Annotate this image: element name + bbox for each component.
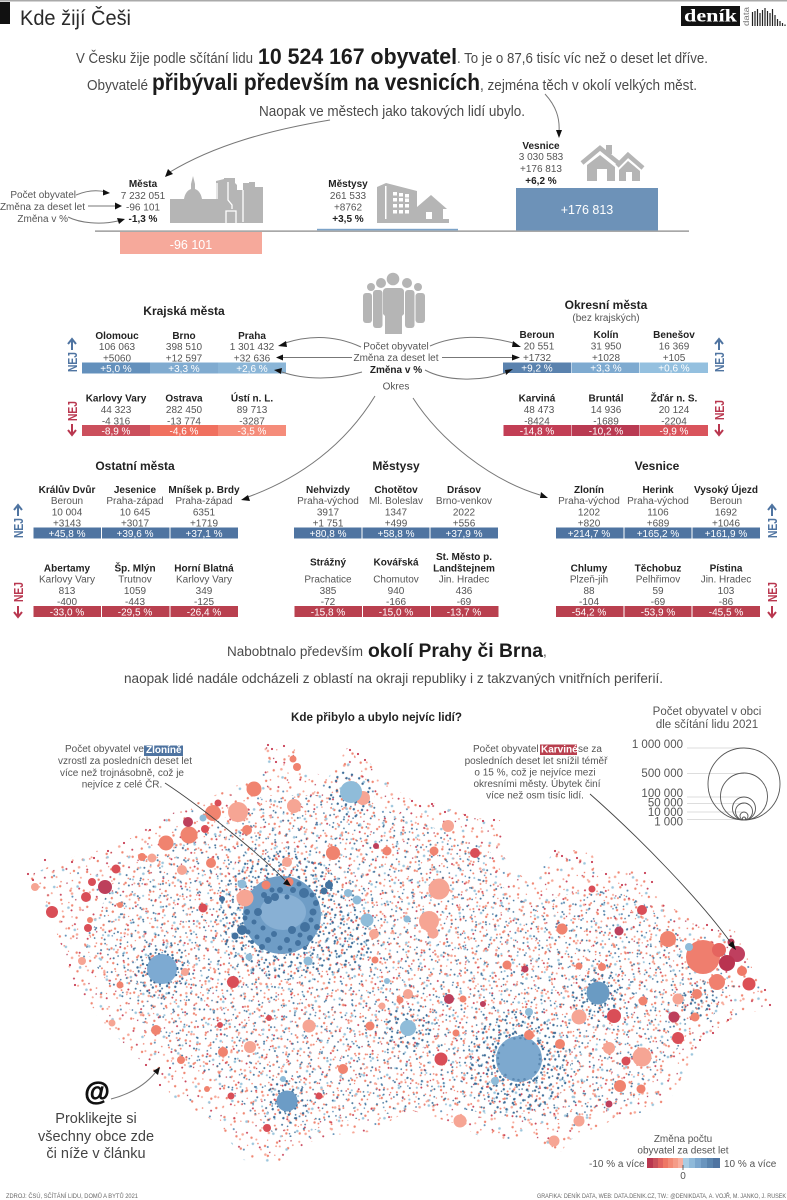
bottom towns: Trutnov — [118, 574, 152, 586]
NEJ down label: NEJ — [11, 582, 26, 602]
top cities: 106 063 — [99, 342, 136, 353]
top villages: 1202 — [578, 508, 601, 518]
bottom cities: Karviná — [519, 394, 556, 404]
top towns: Drásov — [447, 485, 481, 496]
bottom towns: 1059 — [124, 586, 147, 597]
bottom towns: -26,4 % — [187, 608, 221, 618]
click prompt — [38, 1067, 160, 1162]
callout: Karvina: více než osm tisíc lidí. — [486, 790, 584, 802]
bottom villages: -104 — [579, 597, 599, 608]
bottom towns: Prachatice — [304, 574, 352, 586]
heading: Ostatní města — [95, 459, 175, 473]
bottom towns: Abertamy — [44, 564, 90, 574]
settlement type chart — [0, 141, 689, 254]
bottom villages: Jin. Hradec — [701, 574, 751, 586]
top villages: +1046 — [712, 518, 740, 530]
callout: Zlonin: nejvíce z celé ČR. — [82, 778, 162, 790]
labels: mesta: 7 232 051 — [121, 191, 166, 202]
callout: Zlonin: Zloníně — [146, 745, 182, 756]
mid text — [124, 641, 663, 686]
bottom towns: -29,5 % — [118, 608, 152, 618]
labels: vesnice: +6,2 % — [525, 176, 557, 187]
NEJ up label: NEJ — [765, 518, 780, 538]
labels: mestysy — [328, 179, 368, 225]
bottom cities: -8424 — [524, 416, 550, 428]
callout: Zlonin: více než trojnásobně, což je — [60, 768, 184, 779]
bottom cities: 14 936 — [591, 405, 622, 416]
labels: mestysy: 261 533 — [330, 191, 367, 202]
NEJ down label — [712, 400, 727, 435]
bottom villages: -54,2 % — [572, 608, 606, 618]
top cities — [503, 330, 708, 374]
intro text — [76, 44, 708, 120]
bottom towns: Strážný — [310, 558, 346, 568]
bar: mesta — [120, 232, 262, 254]
top cities: 31 950 — [591, 342, 622, 352]
bottom cities: -3287 — [239, 416, 265, 428]
bottom towns: Jin. Hradec — [439, 574, 489, 586]
logo: denik data: data — [742, 6, 751, 26]
bottom villages: Plzeň-jih — [570, 574, 608, 586]
key labels with arrows: Změna v % — [17, 214, 68, 225]
top towns: +45,8 % — [49, 529, 86, 540]
city: Olomouc — [586, 980, 610, 1006]
labels: mesta — [121, 179, 166, 225]
bottom cities: -8,9 % — [102, 426, 131, 438]
bottom cities: Ostrava — [165, 394, 203, 404]
NEJ up label: NEJ — [11, 518, 26, 538]
logo: denik data: deník — [684, 6, 737, 26]
intro text: přibývali především na vesnicích — [152, 69, 480, 95]
bottom towns: -125 — [194, 597, 214, 608]
top villages: Vysoký Újezd — [694, 483, 758, 496]
top towns: +1719 — [190, 518, 218, 530]
bottom towns: -400 — [57, 597, 77, 608]
top towns: Ml. Boleslav — [369, 496, 423, 507]
NEJ up label: NEJ — [65, 352, 80, 372]
top towns: Nehvizdy — [306, 485, 350, 496]
top towns: +37,1 % — [186, 529, 223, 540]
legend: change colour scale: -10 % a více — [589, 1159, 645, 1170]
NEJ down label: NEJ — [765, 582, 780, 602]
heading: Městysy — [372, 459, 420, 473]
arrow: to villages — [545, 94, 562, 138]
mid text: Nabobtnalo především — [227, 644, 363, 659]
legend: change colour scale: obyvatel za deset let — [637, 1146, 729, 1156]
arrow: to villages table — [413, 398, 548, 498]
panel: ostatni mesta — [11, 459, 240, 618]
bottom towns: 813 — [59, 586, 76, 597]
bubble map of Czechia — [0, 730, 787, 1170]
footer: source: ZDROJ: ČSÚ, SČÍTÁNÍ LIDU, DOMŮ A BYTŮ 2021 — [6, 1191, 138, 1200]
top towns: 6351 — [193, 508, 216, 518]
top villages: Praha-východ — [558, 496, 620, 507]
panel: krajska mesta — [65, 304, 286, 438]
top towns: 1347 — [385, 508, 408, 518]
bottom villages: -86 — [719, 597, 734, 608]
top towns — [34, 484, 240, 540]
bar: mestysy — [317, 229, 458, 230]
legend: change colour scale: Změna počtu — [654, 1134, 712, 1145]
bottom villages: -45,5 % — [709, 608, 743, 618]
top villages: Praha-východ — [627, 496, 689, 507]
top cities: +3,3 % — [590, 364, 622, 374]
arrow — [590, 794, 736, 950]
bottom towns: -72 — [321, 597, 336, 608]
top cities: 398 510 — [166, 342, 203, 353]
key labels with arrows: Počet obyvatel — [10, 190, 76, 201]
bottom villages: Pístina — [710, 564, 743, 574]
scattered outer dots — [28, 745, 770, 1085]
intro text: 10 524 167 obyvatel — [258, 44, 457, 69]
icon: people group — [363, 273, 425, 334]
bottom towns: Chomutov — [373, 574, 419, 586]
bottom towns: Šp. Mlýn — [114, 562, 156, 574]
bottom towns: 349 — [196, 586, 213, 597]
top cities — [82, 331, 286, 375]
labels: mestysy: +3,5 % — [332, 214, 364, 225]
intro text: V Česku žije podle sčítání lidu — [76, 50, 253, 67]
key labels center with arrows: Změna v % — [370, 365, 422, 376]
top towns: Králův Dvůr — [39, 484, 95, 496]
top cities: Beroun — [520, 330, 554, 341]
bottom towns: -13,7 % — [447, 608, 481, 618]
bottom towns: -443 — [125, 597, 145, 608]
heading: Krajská města — [143, 304, 225, 318]
top towns: Beroun — [51, 496, 83, 507]
key labels center with arrows: Okres — [383, 382, 409, 392]
bottom cities: 89 713 — [237, 405, 268, 416]
city: Prague — [219, 876, 333, 954]
panel: vesnice — [556, 459, 780, 618]
legend: population size: Počet obyvatel v obci — [653, 706, 761, 718]
bottom cities — [82, 392, 286, 438]
top villages: +689 — [647, 518, 670, 530]
bottom villages: -69 — [651, 597, 666, 608]
top cities: +1732 — [523, 353, 551, 364]
NEJ down label — [65, 401, 80, 435]
top cities: Kolín — [594, 330, 618, 341]
legend: population size: 1 000 — [654, 816, 683, 828]
top towns: Jesenice — [114, 485, 157, 496]
labels: mesta: -1,3 % — [129, 214, 158, 225]
mid text: okolí Prahy či Brna — [368, 641, 543, 662]
bar: mesta: -96 101 — [170, 238, 212, 252]
top villages: 1106 — [647, 508, 669, 518]
header — [0, 0, 787, 30]
bottom cities: -4 316 — [102, 416, 131, 428]
bottom towns: Karlovy Vary — [39, 574, 95, 586]
prompt text: všechny obce zde — [38, 1129, 154, 1145]
prompt text — [38, 1111, 154, 1162]
bottom villages: Chlumy — [571, 564, 608, 574]
bottom cities: -3,5 % — [238, 426, 267, 438]
labels: vesnice: Vesnice — [522, 141, 560, 152]
labels: mesta: -96 101 — [126, 202, 160, 214]
bottom cities: Ústí n. L. — [231, 392, 273, 404]
top villages: Beroun — [710, 496, 742, 507]
top cities: 20 551 — [524, 342, 555, 352]
heading: Okresní města — [565, 298, 648, 312]
bottom cities: Bruntál — [588, 394, 624, 404]
NEJ down label — [11, 582, 26, 617]
bubbles: salmon towns — [87, 756, 702, 1094]
mid text: naopak lidé nadále odcházeli z oblastí na okraji republiky i z takzvaných vnitřních periferií. — [124, 671, 663, 686]
icon: building with house — [377, 183, 449, 223]
logo: denik data — [681, 6, 785, 26]
top towns: +3143 — [53, 518, 81, 530]
mid text: , — [543, 644, 547, 659]
top cities: 1 301 432 — [230, 342, 275, 353]
top villages: +165,2 % — [637, 529, 679, 540]
bottom cities: -13 774 — [167, 416, 201, 428]
arrow: to other cities — [241, 396, 375, 501]
arrow — [111, 1067, 160, 1099]
top cities: +105 — [663, 353, 686, 364]
panel: okresni mesta — [503, 298, 727, 438]
top towns: Chotětov — [374, 485, 418, 496]
callout: Karvina: posledních deset let snížil téměř — [465, 756, 608, 767]
top cities: 16 369 — [659, 342, 690, 352]
top towns: +499 — [385, 518, 408, 530]
bottom villages: Pelhřimov — [636, 574, 680, 586]
top villages: +214,7 % — [568, 529, 610, 540]
top cities: +1028 — [592, 353, 620, 364]
bubbles: pale salmon towns — [31, 791, 684, 1146]
bottom cities: -2204 — [661, 416, 687, 428]
prompt text: Proklikejte si — [55, 1111, 137, 1127]
top villages: Zlonín — [574, 485, 604, 496]
title: Kde žijí Češi — [20, 7, 131, 30]
top towns: 3917 — [317, 508, 340, 518]
bottom cities: Žďár n. S. — [651, 392, 698, 404]
top cities: +32 636 — [234, 354, 271, 364]
legend: population size: 500 000 — [641, 768, 683, 780]
bubble: Ceske Budejovice — [276, 1090, 298, 1112]
bottom cities: 282 450 — [166, 405, 203, 416]
bottom cities: 20 124 — [659, 405, 690, 416]
labels: vesnice — [519, 141, 564, 187]
intro text: , zejména těch v okolí velkých měst. — [480, 78, 697, 94]
top villages — [556, 483, 760, 540]
bottom cities: -10,2 % — [589, 426, 623, 438]
bubbles: red towns — [46, 800, 684, 1132]
bottom towns: Horní Blatná — [174, 564, 234, 574]
bar: vesnice — [516, 188, 658, 230]
top cities: Benešov — [653, 330, 695, 341]
top cities: Brno — [172, 331, 196, 342]
legend: population size — [632, 706, 780, 828]
bottom towns: -15,0 % — [379, 608, 413, 618]
top towns: Praha-východ — [297, 496, 359, 507]
city: Ostrava region — [685, 938, 756, 990]
top towns: +3017 — [121, 518, 149, 530]
labels: mestysy: +8762 — [334, 202, 362, 214]
bottom towns: -33,0 % — [50, 608, 84, 618]
bottom cities — [504, 392, 708, 438]
bottom towns: 385 — [320, 586, 337, 597]
legend: population size: 1 000 000 — [632, 739, 683, 751]
top villages: Herink — [642, 485, 674, 496]
bottom towns — [34, 562, 238, 618]
key labels with arrows — [0, 190, 125, 225]
bottom towns: Landštejnem — [433, 564, 495, 574]
bottom towns: Kovářská — [373, 558, 419, 568]
callout: Karvina: Karviné — [541, 744, 578, 756]
callout: Karvina: Počet obyvatel — [473, 744, 539, 755]
bottom towns: -69 — [457, 597, 472, 608]
panel: mestysy — [294, 459, 498, 618]
top cities: +3,3 % — [168, 364, 200, 375]
bottom villages: -53,9 % — [641, 608, 675, 618]
top cities: Olomouc — [95, 331, 139, 342]
callout: Zlonin: vzrostl za posledních deset let — [58, 756, 192, 767]
top towns: Praha-západ — [106, 496, 164, 507]
labels: mestysy: Městysy — [328, 179, 368, 190]
bubbles: blue towns — [200, 781, 533, 1085]
top cities: +5060 — [103, 354, 131, 364]
top towns — [294, 485, 498, 540]
top towns: Brno-venkov — [436, 496, 492, 507]
top towns: +80,8 % — [310, 529, 347, 540]
bubbles: dark red towns — [98, 817, 680, 1108]
labels: mesta: Města — [129, 179, 158, 190]
arrow: to cities — [165, 120, 330, 177]
top cities: Praha — [238, 331, 266, 342]
top towns: +39,6 % — [117, 529, 154, 540]
map heading: Kde přibylo a ubylo nejvíc lidí? — [291, 710, 462, 724]
NEJ down label — [765, 582, 780, 617]
arrow — [165, 783, 291, 886]
bottom towns: 940 — [388, 586, 405, 597]
top cities: +12 597 — [166, 354, 203, 364]
bottom cities: 44 323 — [101, 405, 132, 416]
bar: vesnice: +176 813 — [561, 203, 613, 217]
top towns: 2022 — [453, 508, 476, 518]
bottom towns: Karlovy Vary — [176, 574, 232, 586]
bottom towns: St. Město p. — [436, 552, 492, 563]
top cities: +5,0 % — [100, 364, 132, 375]
NEJ down label: NEJ — [65, 401, 80, 421]
bottom towns: -166 — [386, 597, 406, 608]
intro text: . To je o 87,6 tisíc víc než o deset let dříve. — [457, 51, 708, 67]
bottom cities: -1689 — [593, 416, 619, 428]
top towns: +1 751 — [313, 518, 344, 530]
callout: Zlonin: Počet obyvatel ve — [65, 744, 144, 755]
heading: Vesnice — [635, 459, 680, 473]
top cities: +9,2 % — [521, 364, 553, 374]
bottom villages: Těchobuz — [635, 564, 681, 574]
bottom cities: 48 473 — [524, 405, 555, 416]
bottom towns: 436 — [456, 586, 473, 597]
legend: change colour scale — [589, 1134, 777, 1182]
bottom cities: Karlovy Vary — [86, 394, 147, 404]
legend: change colour scale: 0 — [680, 1171, 686, 1182]
key labels with arrows: Změna za deset let — [0, 202, 85, 213]
legend: population size: 10 000 — [648, 807, 683, 819]
top towns: Praha-západ — [175, 496, 233, 507]
icon: village houses — [582, 145, 643, 181]
NEJ up label: NEJ — [712, 352, 727, 372]
top cities: +2,6 % — [236, 364, 268, 375]
city: Brno — [493, 1033, 545, 1085]
top towns: +58,8 % — [378, 529, 415, 540]
legend: population size: 100 000 — [641, 788, 683, 800]
top cities: +0,6 % — [658, 364, 690, 374]
callout: Zlonin — [58, 744, 291, 886]
bottom villages: 88 — [583, 586, 595, 597]
prompt text: či níže v článku — [46, 1146, 146, 1162]
top villages: +161,9 % — [705, 529, 747, 540]
callout: Karvina — [465, 744, 736, 950]
labels: vesnice: +176 813 — [520, 164, 562, 175]
legend: population size: dle sčítání lidu 2021 — [656, 719, 758, 731]
city: Plzen — [146, 954, 178, 984]
key labels center with arrows: Změna za deset let — [353, 353, 439, 364]
axis — [95, 230, 689, 232]
icon: city skyline — [170, 176, 263, 223]
intro text: Obyvatelé — [87, 78, 148, 94]
icon: at sign: @ — [84, 1076, 110, 1106]
bottom cities: -14,8 % — [520, 426, 554, 438]
intro text: Naopak ve městech jako takových lidí ubylo. — [259, 104, 525, 120]
top towns: 10 645 — [120, 508, 151, 518]
callout: Karvina: okresními městy. Úbytek činí — [473, 777, 601, 790]
bottom cities: -9,9 % — [660, 426, 689, 438]
key labels center with arrows: Počet obyvatel — [363, 342, 429, 352]
callout: Karvina: o 15 %, což je nejvíce mezi — [474, 768, 596, 778]
legend: change colour scale: 10 % a více — [724, 1159, 777, 1170]
subheading: (bez krajských) — [572, 313, 640, 324]
bottom towns — [294, 552, 498, 618]
callout: Karvina: se za — [578, 744, 602, 755]
top towns: +37,9 % — [446, 529, 483, 540]
top towns: 10 004 — [52, 508, 83, 518]
bottom villages: 103 — [718, 586, 735, 597]
bottom villages — [556, 564, 760, 618]
bottom villages: 59 — [652, 586, 664, 597]
bottom towns: -15,8 % — [311, 608, 345, 618]
NEJ down label: NEJ — [712, 400, 727, 420]
top towns: Mníšek p. Brdy — [168, 485, 240, 496]
top villages: +820 — [578, 518, 601, 530]
bottom cities: -4,6 % — [170, 426, 199, 438]
legend: population size: 50 000 — [648, 798, 683, 810]
top towns: +556 — [453, 518, 476, 530]
labels: vesnice: 3 030 583 — [519, 152, 564, 163]
top villages: 1692 — [715, 508, 738, 518]
key labels center with arrows — [274, 337, 521, 392]
